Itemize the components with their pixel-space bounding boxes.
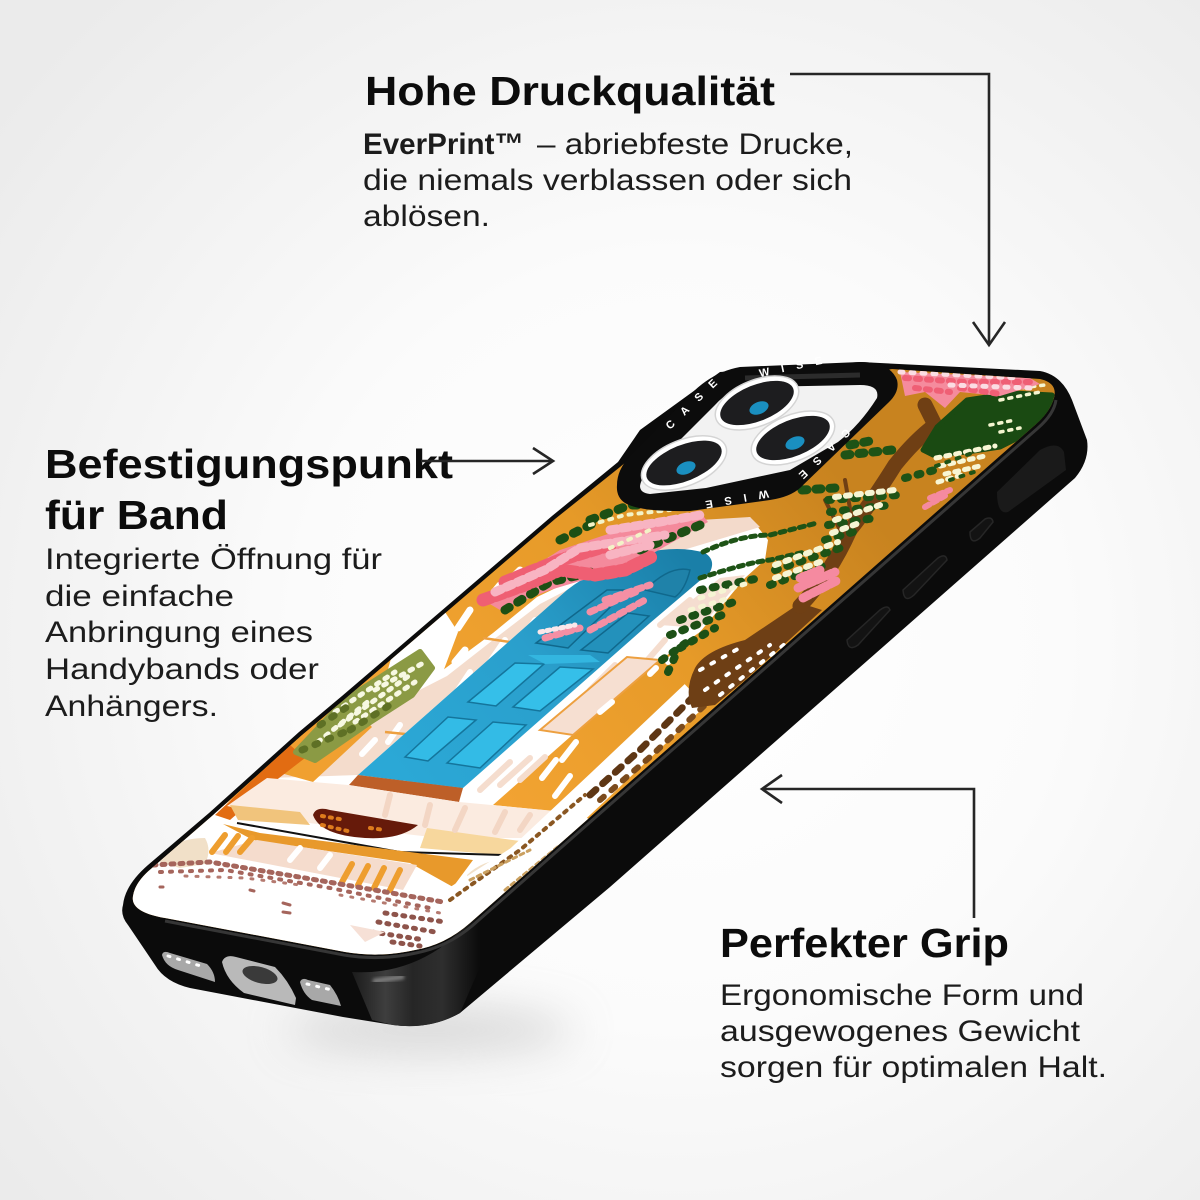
flower mass bbox=[483, 512, 708, 610]
body text: die einfache bbox=[45, 580, 234, 613]
stone and ground bbox=[120, 517, 768, 965]
pink flowers above door bbox=[483, 505, 708, 638]
phone case illustration bbox=[120, 352, 1088, 1026]
peach block upper bbox=[660, 575, 745, 628]
rocks bbox=[160, 838, 490, 876]
pink door flowers bbox=[545, 585, 650, 638]
heading: Hohe Druckqualität bbox=[365, 68, 775, 114]
arrow: print quality bbox=[790, 74, 1005, 345]
body text bbox=[45, 543, 382, 723]
olive bush bbox=[296, 652, 432, 760]
side buttons bbox=[847, 445, 1066, 648]
case corner highlight bbox=[352, 916, 496, 1026]
body text: EverPrint™ bbox=[363, 128, 524, 161]
body text: ablösen. bbox=[363, 200, 490, 233]
white dabs on left wall bbox=[455, 570, 520, 662]
pink cluster bbox=[798, 570, 838, 598]
arrow: grip bbox=[762, 775, 974, 918]
arrow: strap attachment bbox=[421, 448, 553, 474]
right stone streaks bbox=[480, 600, 690, 790]
small orange wall lower left bbox=[284, 726, 372, 782]
peach stone left of door bbox=[270, 590, 567, 778]
body text: ausgewogenes Gewicht bbox=[720, 1015, 1081, 1048]
body text: Ergonomische Form und bbox=[720, 979, 1084, 1012]
peach block bbox=[540, 657, 660, 735]
heading: für Band bbox=[45, 492, 228, 538]
brand ring text: WISE bbox=[758, 352, 835, 380]
pink blossom top bbox=[900, 372, 1040, 408]
phone shadow bbox=[285, 1008, 575, 1052]
body text: Integrierte Öffnung für bbox=[45, 543, 382, 576]
camera lenses bbox=[634, 365, 842, 501]
pebble strip along the edge bbox=[450, 695, 705, 905]
callout: Perfekter Grip bbox=[720, 920, 1107, 1084]
white wall patch bbox=[388, 612, 458, 670]
case highlight stripe bbox=[375, 977, 402, 981]
brand ring text: WISE bbox=[693, 487, 770, 512]
blue door bbox=[358, 549, 712, 790]
stone seam left bbox=[385, 638, 510, 735]
heading: Perfekter Grip bbox=[720, 920, 1009, 966]
terracotta pot bbox=[313, 809, 418, 838]
arch stone peach bbox=[658, 517, 760, 550]
camera island bbox=[617, 352, 898, 512]
dark green foliage top right bbox=[923, 385, 1052, 482]
body text bbox=[720, 979, 1107, 1084]
heading bbox=[45, 441, 453, 538]
callout: Hohe Druckqualität bbox=[363, 68, 853, 233]
orange wall bbox=[120, 360, 1070, 970]
brand ring text: CASE bbox=[787, 426, 852, 489]
callout: Befestigungspunkt für Band bbox=[45, 441, 453, 723]
printed artwork bbox=[120, 360, 1070, 970]
vines and blossoms right of door bbox=[662, 440, 950, 672]
heading: Befestigungspunkt bbox=[45, 441, 453, 487]
orange wall dabs bbox=[542, 656, 674, 796]
steps bbox=[210, 778, 577, 890]
door sill bbox=[349, 775, 463, 802]
dark orange strip bbox=[215, 745, 305, 820]
body text: sorgen für optimalen Halt. bbox=[720, 1051, 1107, 1084]
bottom speaker and charging ports bbox=[162, 952, 341, 1006]
case body bbox=[122, 362, 1087, 1026]
body text: Anbringung eines bbox=[45, 616, 313, 649]
brand ring text: CASE bbox=[664, 369, 729, 432]
body text: Anhängers. bbox=[45, 690, 218, 723]
body text: Handybands oder bbox=[45, 653, 319, 686]
brand ring text bbox=[664, 352, 852, 512]
white streaks on stone bbox=[362, 620, 535, 754]
case side inner rim bbox=[165, 400, 1056, 958]
body text bbox=[363, 128, 853, 233]
ground pebbles bbox=[153, 862, 445, 946]
body text: – abriebfeste Drucke, bbox=[537, 128, 853, 161]
tree trunk bbox=[689, 405, 935, 708]
body text: die niemals verblassen oder sich bbox=[363, 164, 852, 197]
